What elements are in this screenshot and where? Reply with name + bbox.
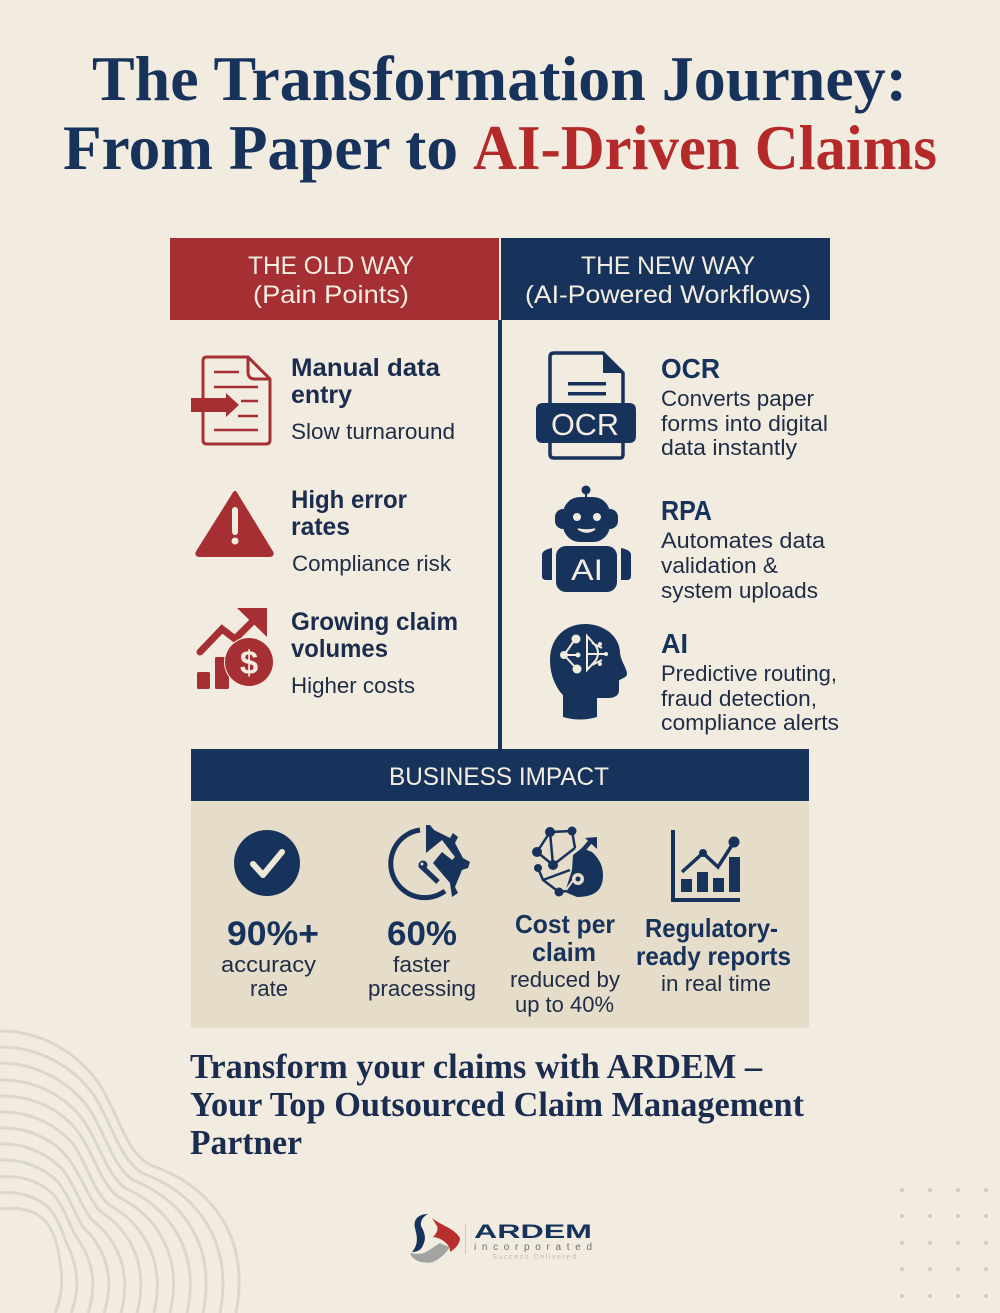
logo: ARDEM: Success Delivered [492,1252,576,1261]
stat: cost per claim: claim [532,937,596,967]
text: RPA: system uploads [661,578,818,603]
icon: warning triangle [197,493,272,555]
stat: regulatory-ready reports [636,913,791,996]
text: manual data entry: entry [291,381,352,409]
stat: faster processing [368,915,476,1001]
stat: regulatory-ready reports: in real time [661,971,771,996]
stat: faster processing: 60% [387,915,457,953]
text: manual data entry: Manual data [291,354,441,382]
stat: regulatory-ready reports: ready reports [636,941,791,971]
icon: AI head [550,624,627,720]
heading: business impact: BUSINESS IMPACT [389,763,609,791]
text: high error rates [291,486,452,576]
panel: old way header [170,238,499,320]
title: From Paper to [63,113,458,183]
stat: regulatory-ready reports: Regulatory- [645,913,778,943]
icon: robot [542,486,631,592]
icon: growing volumes chart with dollar: $ [240,644,258,681]
text: high error rates: Compliance risk [292,551,452,576]
text: AI: AI [661,628,688,659]
call to action: Your Top Outsourced Claim Management [190,1085,804,1124]
text: AI: Predictive routing, [661,661,837,686]
call to action: Transform your claims with ARDEM – [190,1047,762,1086]
icon: growing volumes chart with dollar [197,608,274,689]
text: AI [661,628,839,735]
icon: manual data entry document [191,357,270,444]
stat: cost per claim: up to 40% [515,992,614,1017]
logo: ARDEM [410,1214,592,1263]
text: OCR: forms into digital [661,411,828,436]
text: growing claim volumes: volumes [291,635,388,663]
text: OCR: Converts paper [661,386,814,411]
text: manual data entry: Slow turnaround [291,419,455,444]
text: manual data entry [291,354,455,444]
panel: business impact [191,749,809,1028]
text: OCR: data instantly [661,435,797,460]
text: AI: compliance alerts [661,710,839,735]
stat: accuracy [221,915,319,1001]
stat: accuracy: accuracy [221,952,316,977]
stat: accuracy: rate [250,976,288,1001]
text: high error rates: rates [291,513,350,541]
stat: accuracy: 90%+ [227,915,319,953]
stat: cost per claim: Cost per [515,909,615,939]
panel: new way header [501,238,830,320]
text: RPA [661,495,826,603]
text: growing claim volumes: Higher costs [291,673,415,698]
panel: new way header: (AI-Powered Workflows) [525,281,811,309]
icon: network and cost reduction [532,826,603,897]
title [63,44,937,183]
logo: ARDEM: ARDEM [474,1222,592,1243]
icon: robot: AI [571,554,603,587]
stat: cost per claim [510,909,620,1017]
text: growing claim volumes: Growing claim [291,608,458,636]
icon: OCR scanner: OCR [551,407,619,442]
text: RPA: RPA [661,495,712,526]
icon: stopwatch [391,825,470,898]
text: RPA: validation & [661,553,778,578]
title: AI-Driven Claims [473,113,937,183]
call to action [190,1047,804,1162]
icon: OCR scanner [536,353,636,458]
icon: check circle [234,830,300,896]
panel: old way header: THE OLD WAY [248,252,414,280]
panel: new way header: THE NEW WAY [581,252,755,280]
heading: business impact [191,749,809,801]
text: high error rates: High error [291,486,407,514]
stat: faster processing: faster [393,952,450,977]
text: RPA: Automates data [661,528,826,553]
stat: cost per claim: reduced by [510,967,620,992]
stat: faster processing: pracessing [368,976,476,1001]
logo: ARDEM: incorporated [474,1242,592,1253]
panel: old way header: (Pain Points) [253,281,409,309]
text: OCR: OCR [661,353,720,384]
call to action: Partner [190,1123,302,1162]
text: AI: fraud detection, [661,686,817,711]
text: OCR [661,353,828,460]
icon: rising bar chart [673,830,740,900]
text: growing claim volumes [291,608,458,698]
title: The Transformation Journey: [92,44,907,114]
